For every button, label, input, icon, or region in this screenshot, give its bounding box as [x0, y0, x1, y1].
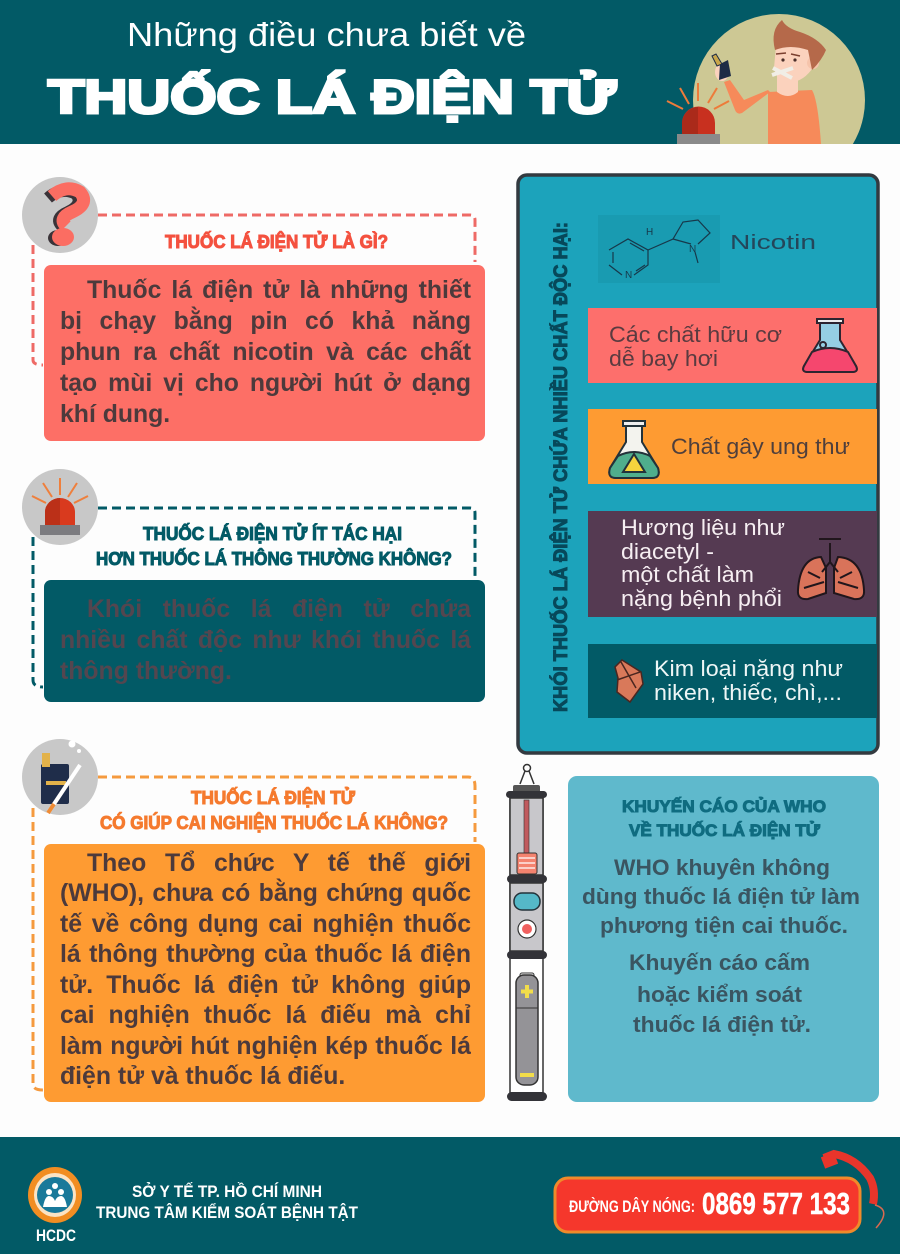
icon: siren	[22, 469, 98, 545]
text block: thông thường.	[60, 658, 232, 685]
icon: warning flask	[609, 421, 659, 478]
heading: THUỐC LÁ ĐIỆN TỬ	[191, 787, 355, 808]
hotline badge	[555, 1178, 860, 1232]
panel: quit smoking?	[22, 739, 485, 1102]
recommendation text: Khuyến cáo cấm	[629, 950, 810, 975]
flavouring row: nặng bệnh phổi	[621, 586, 782, 611]
panel: what is e-cigarette	[22, 177, 485, 441]
text block: cai nghiện thuốc lá điếu mà chỉ	[60, 1002, 471, 1029]
heavy metals row	[588, 644, 877, 718]
panel: toxic chemicals	[518, 175, 878, 753]
icon: vape and cigarette	[22, 739, 98, 815]
icon: nicotine molecule	[609, 220, 710, 281]
icon: nicotine molecule: H	[646, 227, 653, 238]
flavouring row: Hương liệu như	[621, 515, 785, 540]
carcinogens row: Chất gây ung thư	[671, 434, 850, 459]
illustration: man with taped mouth and siren	[666, 14, 865, 144]
flavouring row	[588, 511, 877, 617]
panel: WHO recommendation	[568, 776, 879, 1102]
hotline badge: ĐƯỜNG DÂY NÓNG:	[569, 1197, 695, 1216]
recommendation text: hoặc kiểm soát	[637, 982, 803, 1007]
organisation name: SỞ Y TẾ TP. HỒ CHÍ MINH	[132, 1182, 322, 1201]
text block: khí dung.	[60, 401, 170, 428]
text block: tạo mùi vị cho người hút ở dạng	[60, 370, 471, 397]
vertical heading: KHÓI THUỐC LÁ ĐIỆN TỬ CHỨA NHIỀU CHẤT ĐỘC HẠI:	[550, 222, 572, 712]
panel: less harmful?	[22, 469, 485, 702]
icon: red telephone	[823, 1154, 884, 1228]
title line 1: Những điều chưa biết về	[127, 16, 526, 53]
carcinogens row	[588, 409, 877, 484]
text block: lá thông thường của thuốc lá điện	[60, 941, 471, 968]
organisation name: TRUNG TÂM KIỂM SOÁT BỆNH TẬT	[96, 1203, 359, 1222]
volatile organics row	[588, 308, 877, 383]
flavouring row: một chất làm	[621, 562, 754, 587]
volatile organics row: Các chất hữu cơ	[609, 322, 782, 347]
heading: KHUYẾN CÁO CỦA WHO	[622, 797, 826, 816]
text block: Theo Tổ chức Y tế thế giới	[87, 850, 471, 877]
text block: (WHO), chưa có bằng chứng quốc	[60, 880, 471, 907]
heading	[622, 797, 826, 840]
icon: nicotine molecule: N	[625, 270, 632, 281]
text block	[44, 580, 485, 702]
icon: flask	[803, 319, 857, 372]
heading: CÓ GIÚP CAI NGHIỆN THUỐC LÁ KHÔNG?	[100, 812, 448, 833]
logo: HCDC: HCDC	[36, 1226, 76, 1245]
recommendation text	[582, 855, 860, 1037]
heading: VỀ THUỐC LÁ ĐIỆN TỬ	[629, 820, 821, 840]
heading: THUỐC LÁ ĐIỆN TỬ LÀ GÌ?	[165, 231, 388, 252]
heading	[100, 787, 448, 833]
nicotine row: Nicotin	[730, 232, 816, 254]
text block	[44, 844, 485, 1102]
text block: bị chạy bằng pin có khả năng	[60, 308, 471, 335]
dashed frame	[33, 777, 475, 1090]
heading	[96, 523, 452, 569]
icon: nicotine molecule: N	[689, 244, 696, 255]
icon: metal rock	[615, 660, 643, 702]
text block	[44, 265, 485, 441]
icon: lungs	[798, 539, 864, 599]
text block: nhiều chất độc như khói thuốc lá	[60, 627, 471, 654]
organisation name	[96, 1182, 359, 1222]
heading: THUỐC LÁ ĐIỆN TỬ ÍT TÁC HẠI	[143, 523, 402, 544]
heavy metals row: Kim loại nặng như	[654, 656, 843, 681]
text block: điện tử và thuốc lá điếu.	[60, 1063, 345, 1090]
recommendation text: thuốc lá điện tử.	[633, 1012, 811, 1037]
nicotine row	[598, 215, 816, 283]
text block: làm người hút nghiện kép thuốc lá	[60, 1033, 471, 1060]
illustration: e-cigarette device	[506, 764, 547, 1101]
heading: HƠN THUỐC LÁ THÔNG THƯỜNG KHÔNG?	[96, 548, 452, 569]
recommendation text: WHO khuyên không	[614, 855, 830, 880]
text block: Thuốc lá điện tử là những thiết	[87, 277, 471, 304]
text block: tế về công dụng cai nghiện thuốc	[60, 911, 471, 938]
title line 2: THUỐC LÁ ĐIỆN TỬ	[48, 70, 616, 123]
text block: Khói thuốc lá điện tử chứa	[87, 596, 471, 623]
recommendation text: phương tiện cai thuốc.	[600, 913, 848, 938]
text block: tử. Thuốc lá điện tử không giúp	[60, 972, 471, 999]
volatile organics row: dễ bay hơi	[609, 346, 718, 371]
text block: phun ra chất nicotin và các chất	[60, 339, 471, 366]
header band	[0, 0, 900, 144]
recommendation text: dùng thuốc lá điện tử làm	[582, 884, 860, 909]
icon: question mark	[22, 177, 98, 253]
footer band	[0, 1137, 900, 1254]
logo: HCDC	[28, 1167, 82, 1245]
hotline badge: 0869 577 133	[702, 1186, 850, 1221]
dashed frame	[33, 215, 475, 365]
dashed frame	[33, 508, 475, 687]
flavouring row: diacetyl -	[621, 539, 714, 564]
heavy metals row: niken, thiếc, chì,...	[654, 680, 842, 705]
